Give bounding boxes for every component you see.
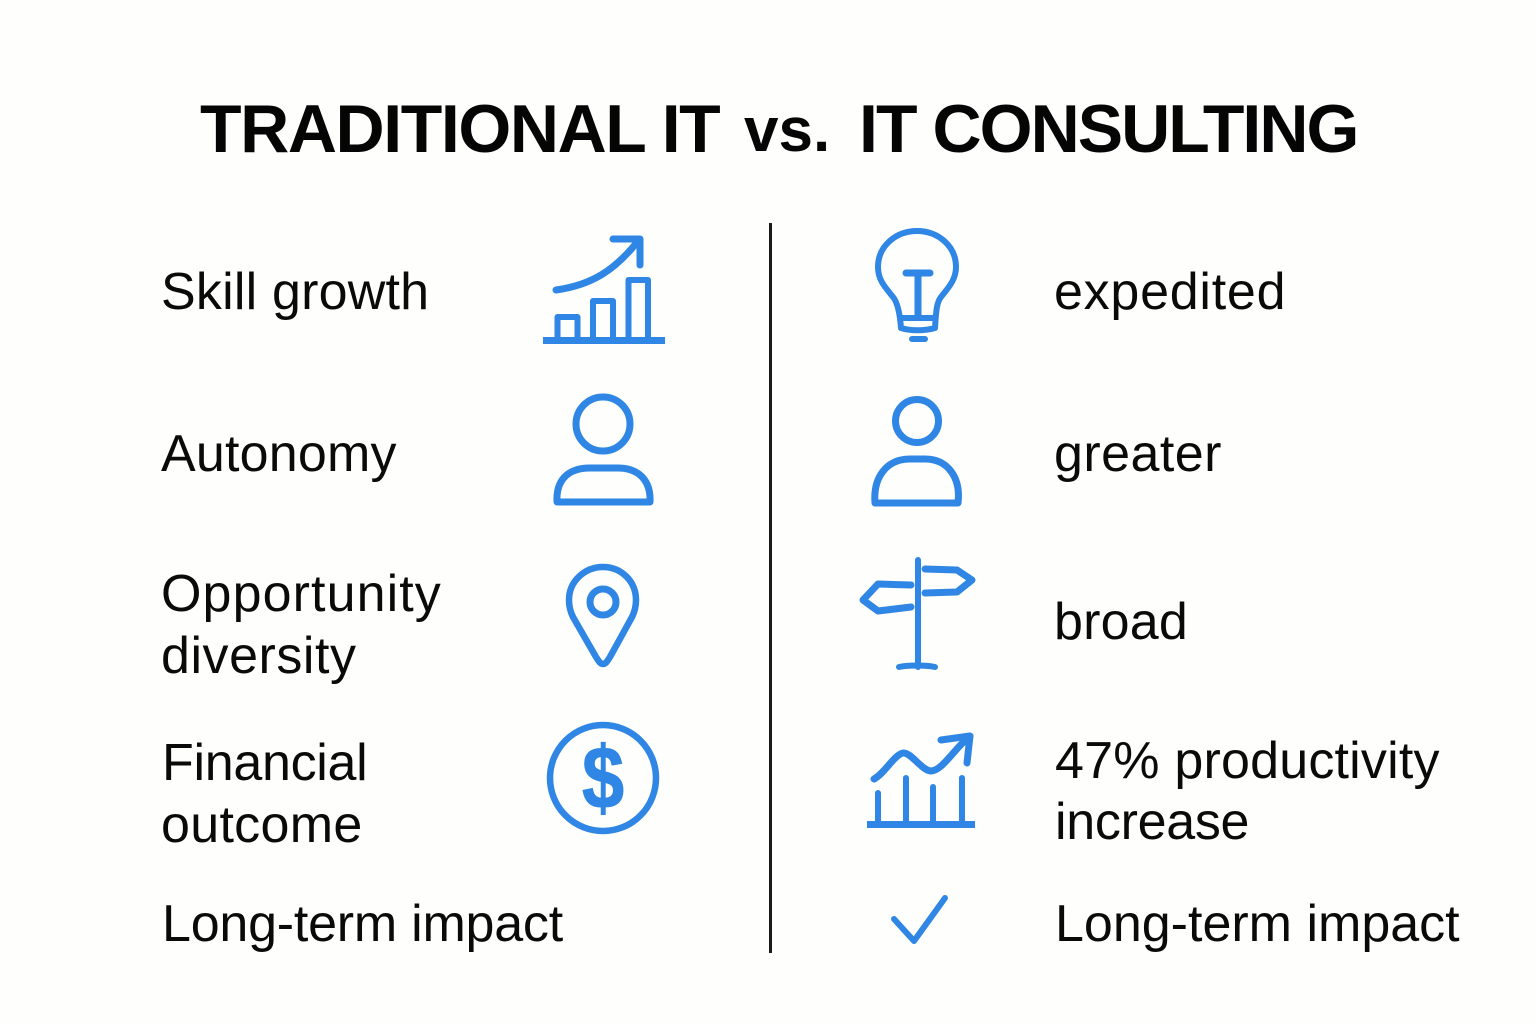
- label: financial outcome: [161, 734, 367, 854]
- icon: lightbulb: [878, 231, 956, 339]
- label: broad: broad: [1054, 593, 1188, 651]
- icon: signpost: [863, 560, 972, 667]
- icon: location pin: [569, 567, 636, 664]
- label: expedited: expedited: [1054, 263, 1286, 321]
- icon: growth bars with arrow: [543, 239, 665, 340]
- label: opportunity diversity: Opportunity: [161, 565, 442, 623]
- title: vs.: [744, 96, 830, 165]
- icon: person left: [557, 397, 650, 502]
- label: financial outcome: outcome: [161, 796, 363, 854]
- label: opportunity diversity: diversity: [161, 627, 356, 685]
- label: 47% productivity increase: [1055, 732, 1440, 851]
- label: long-term impact right: Long-term impact: [1055, 895, 1460, 953]
- label: autonomy: Autonomy: [161, 425, 397, 483]
- title: IT CONSULTING: [859, 91, 1357, 167]
- title: [200, 91, 1357, 167]
- label: 47% productivity increase: increase: [1055, 793, 1249, 851]
- icon: person right: [875, 400, 958, 503]
- center divider: [769, 223, 772, 953]
- icon: check mark: [894, 898, 945, 941]
- label: opportunity diversity: [161, 565, 442, 685]
- dollar sign: $: [582, 728, 624, 827]
- label: greater: greater: [1054, 425, 1222, 483]
- label: financial outcome: Financial: [162, 734, 367, 792]
- icon: rising line chart: [867, 736, 975, 824]
- icon: dollar coin: [550, 725, 656, 831]
- title: TRADITIONAL IT: [200, 91, 719, 167]
- label: 47% productivity increase: 47% productivity: [1055, 732, 1440, 790]
- label: skill growth: Skill growth: [161, 263, 429, 321]
- label: long-term impact left: Long-term impact: [162, 895, 563, 953]
